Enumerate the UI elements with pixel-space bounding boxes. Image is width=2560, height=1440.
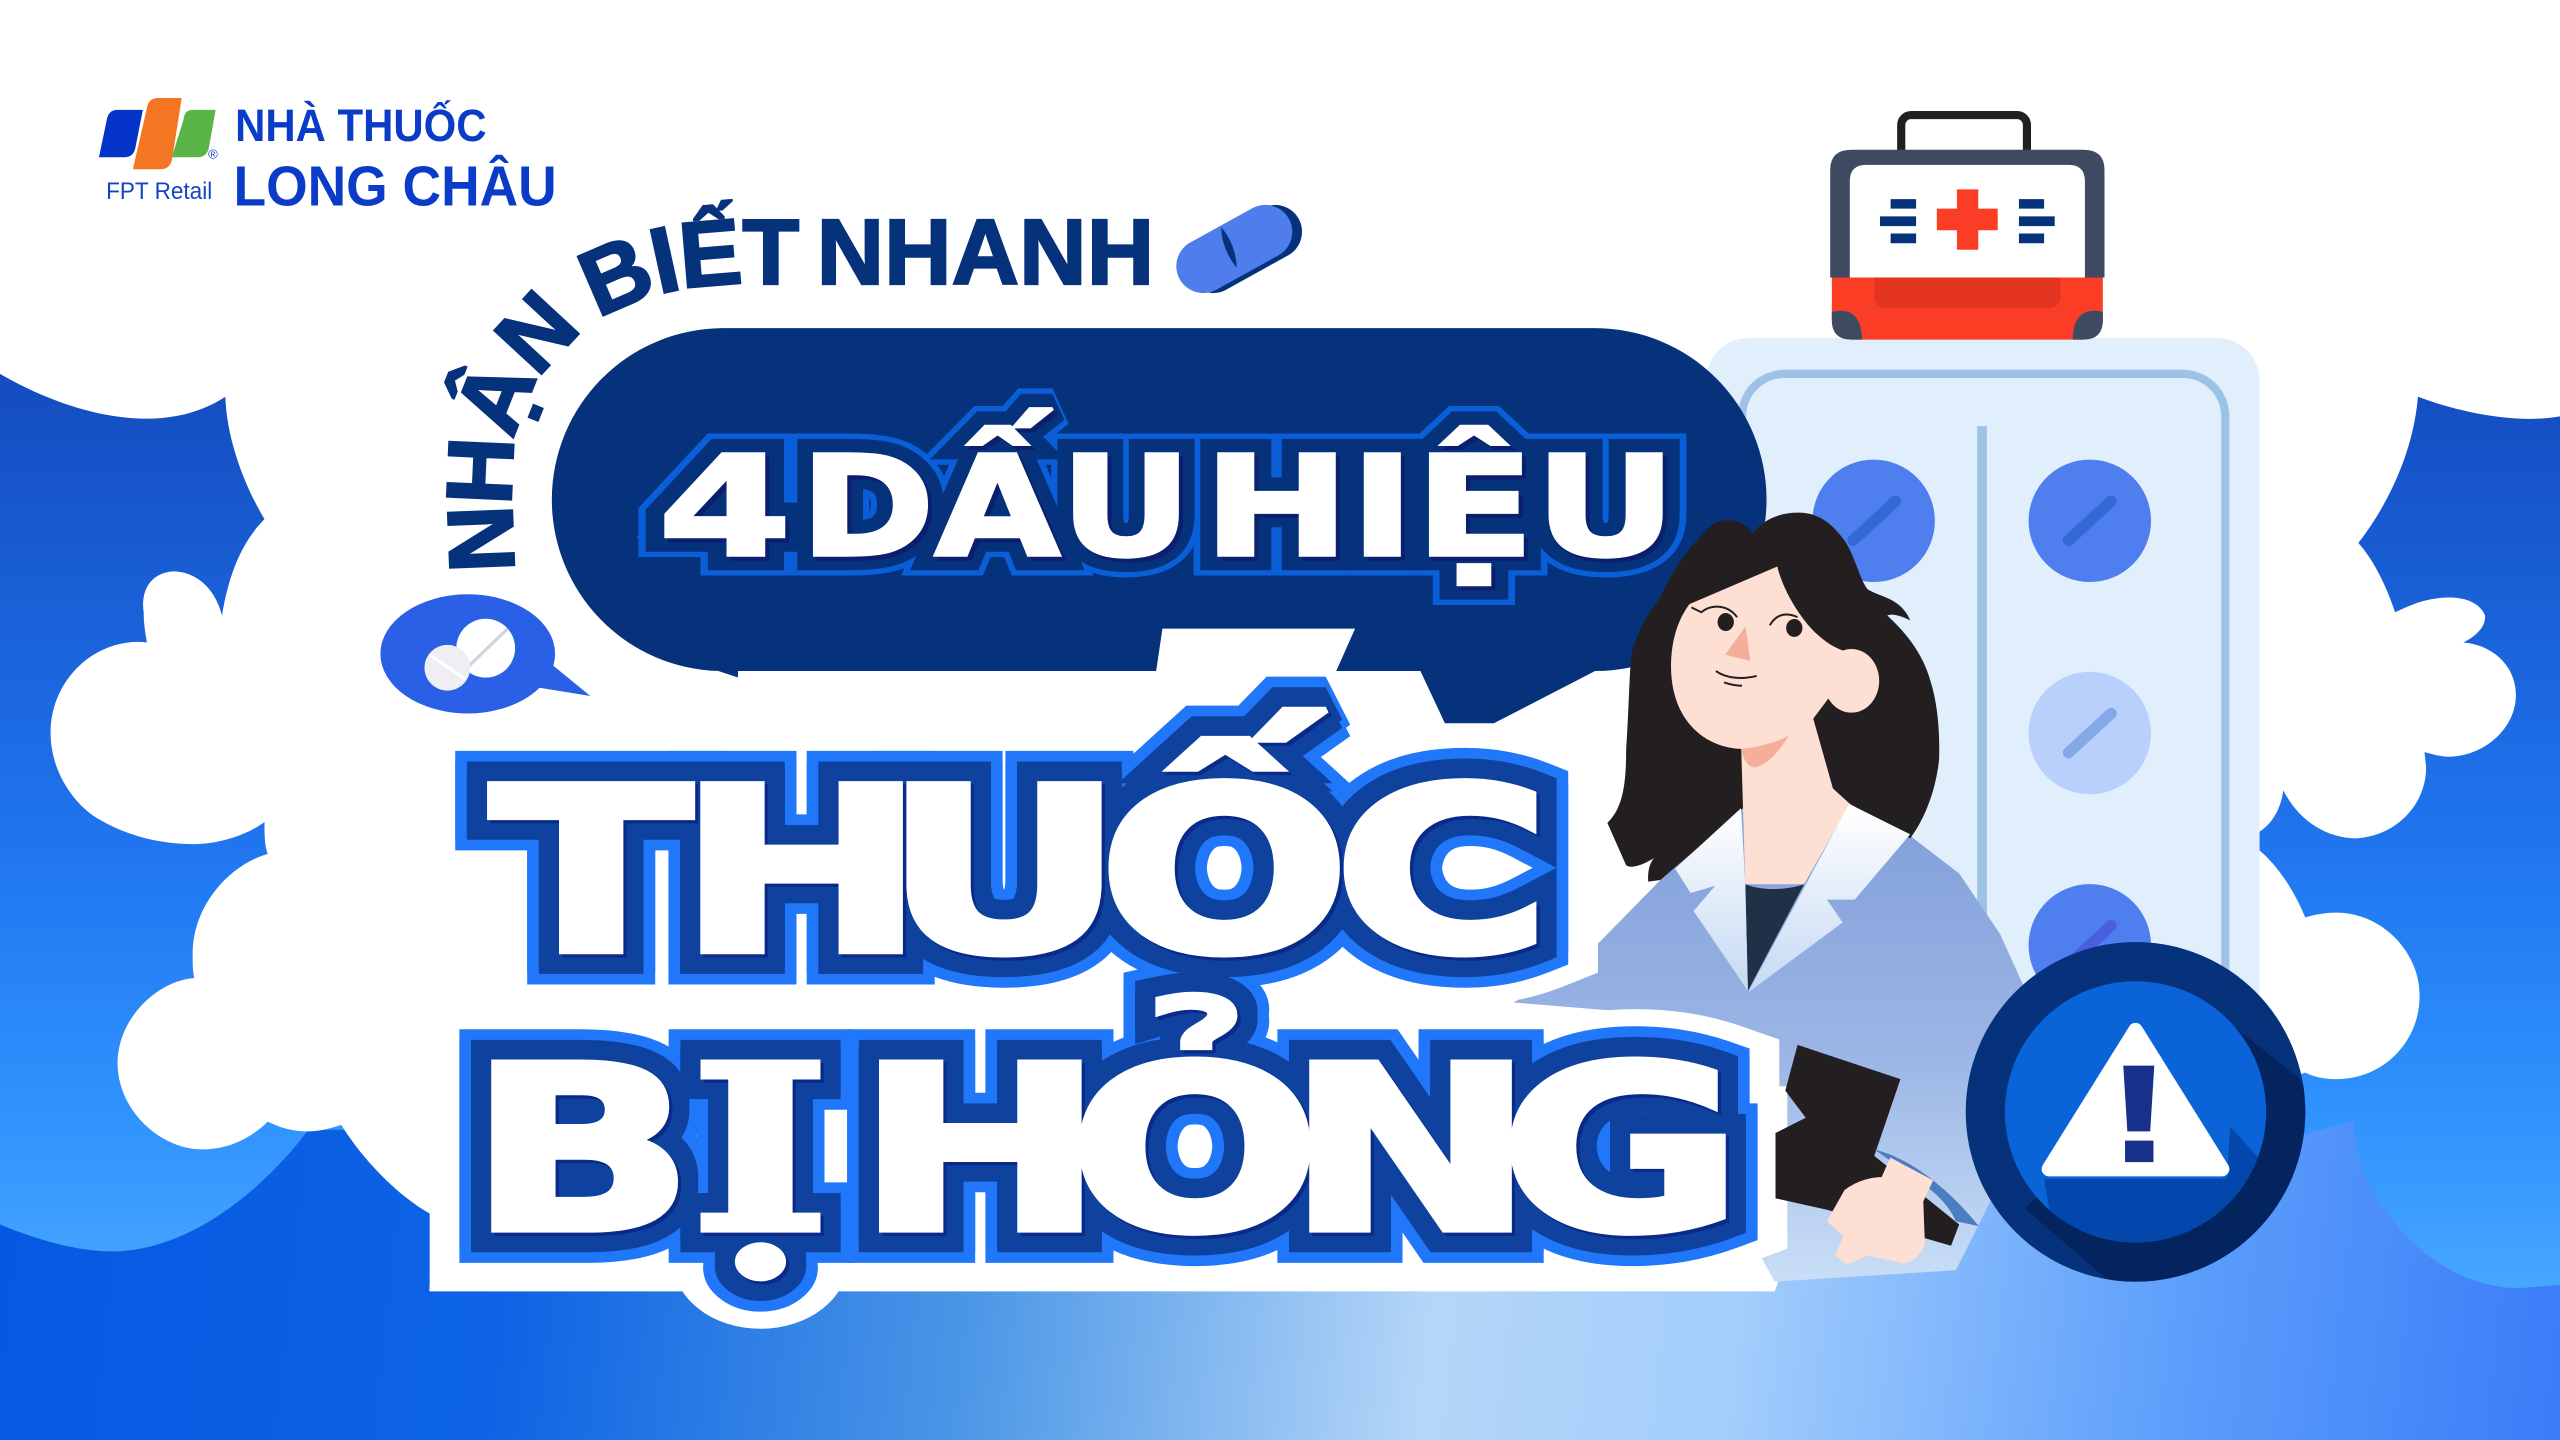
heading: 4 DẤU HIỆU: HIỆU (1203, 426, 1677, 588)
heading: 4 DẤU HIỆU: HIỆU (1207, 430, 1681, 592)
main title: THUỐC BỊ HỎNG: HỎNG (856, 988, 1743, 1278)
icon: first aid kit (1830, 115, 2104, 340)
outer ring long shadow (2024, 1028, 2306, 1282)
icon: capsule (1203, 227, 1275, 268)
main title: THUỐC BỊ HỎNG: HỎNG (856, 990, 1743, 1280)
blister pack panel (1706, 338, 2260, 1190)
heading: 4 DẤU HIỆU: DẤU (804, 412, 1196, 592)
main title: THUỐC BỊ HỎNG: B (468, 1021, 695, 1288)
LONG CHÂU wordmark: LONG CHÂU (233, 155, 557, 218)
white sticker tab over bubble (1156, 629, 1355, 673)
hair (1607, 513, 1939, 882)
main title: THUỐC BỊ HỎNG: B (468, 1023, 695, 1289)
heading: 4 DẤU HIỆU: 4 (658, 426, 792, 588)
main title: THUỐC BỊ HỎNG: B (468, 1013, 695, 1280)
nose (1725, 626, 1750, 661)
clipboard (1776, 1045, 1959, 1246)
FPT Retail label: FPT Retail (106, 179, 212, 205)
main title: THUỐC BỊ HỎNG: Ị (691, 1009, 830, 1278)
neck shadow (1741, 735, 1789, 767)
NHÀ THUỐC wordmark: NHÀ THUỐC (235, 99, 487, 151)
collar left (1675, 808, 1748, 991)
sleeve cuff (1874, 1149, 1979, 1226)
main title: THUỐC BỊ HỎNG: HỎNG (856, 994, 1743, 1284)
pill 3 (2029, 672, 2151, 794)
heading: 4 DẤU HIỆU: 4 (658, 426, 792, 588)
main title: THUỐC BỊ HỎNG (468, 702, 1747, 1289)
main title: THUỐC BỊ HỎNG: Ị (691, 1011, 830, 1280)
main title: THUỐC BỊ HỎNG: HỎNG (859, 997, 1747, 1287)
inner long shadow (2044, 1126, 2258, 1242)
heading: 4 DẤU HIỆU: DẤU (800, 408, 1192, 588)
background: blue sky band (0, 327, 2560, 1440)
woman: figure (1607, 513, 1979, 1264)
main title: THUỐC BỊ HỎNG: B (468, 1012, 695, 1278)
main title: THUỐC BỊ HỎNG: B (471, 1021, 698, 1287)
heading: 4 DẤU HIỆU (658, 408, 1681, 592)
icon: warning badge (1966, 942, 2318, 1306)
shirt (1745, 884, 1804, 991)
main title: THUỐC BỊ HỎNG: THUỐC (490, 712, 1551, 1009)
main title: THUỐC BỊ HỎNG: THUỐC (493, 711, 1554, 1009)
eyes and brows (1691, 607, 1802, 686)
icon: pills speech bubble (380, 594, 590, 713)
collar right (1748, 804, 1910, 993)
main title: THUỐC BỊ HỎNG: THUỐC (490, 708, 1551, 1005)
main title: THUỐC BỊ HỎNG: THUỐC (490, 714, 1551, 1011)
pill 4 (2029, 884, 2151, 1007)
main title: THUỐC BỊ HỎNG: HỎNG (856, 998, 1743, 1288)
exclamation mark (2123, 1066, 2154, 1162)
heading: curved NHẬN BIẾT NHANH: NHẬN BIẾT NHANH (444, 198, 1149, 569)
main title: THUỐC BỊ HỎNG: Ị (691, 1019, 830, 1288)
main title: THUỐC BỊ HỎNG: THUỐC (490, 702, 1551, 1000)
face (1671, 567, 1844, 749)
heading: 4 DẤU HIỆU: 4 (658, 426, 792, 588)
main title: THUỐC BỊ HỎNG: HỎNG (856, 994, 1743, 1284)
logo: FPT Retail Long Chau (99, 98, 557, 218)
main title: THUỐC BỊ HỎNG: Ị (691, 1020, 830, 1289)
ear (1824, 649, 1879, 713)
warning triangle (2049, 1030, 2222, 1169)
heading: 4 DẤU HIỆU: DẤU (800, 408, 1192, 588)
pill 1 (1812, 460, 1935, 582)
main title: THUỐC BỊ HỎNG: Ị (691, 1015, 830, 1284)
pill 2 (2029, 460, 2151, 582)
heading: 4 DẤU HIỆU: HIỆU (1203, 426, 1677, 588)
heading: 4 DẤU HIỆU: DẤU (800, 408, 1192, 588)
heading: 4 DẤU HIỆU: HIỆU (1203, 426, 1677, 588)
main title: THUỐC BỊ HỎNG: B (468, 1017, 695, 1284)
main title: THUỐC BỊ HỎNG: B (468, 1017, 695, 1284)
main title: THUỐC BỊ HỎNG: Ị (694, 1018, 833, 1287)
background: foreground wave gradient (0, 1120, 2560, 1440)
main title: THUỐC BỊ HỎNG: Ị (691, 1015, 830, 1284)
main title: THUỐC BỊ HỎNG: THUỐC (490, 708, 1551, 1005)
registered mark: ® (208, 146, 218, 161)
icon: FPT bars (99, 98, 216, 169)
neck (1741, 715, 1850, 884)
main title: THUỐC BỊ HỎNG: THUỐC (490, 704, 1551, 1001)
heading: 4 DẤU HIỆU: 4 (662, 430, 796, 592)
speech bubble: navy panel with tail (552, 328, 1767, 723)
main title: THUỐC BỊ HỎNG: HỎNG (856, 999, 1743, 1289)
hand (1827, 1158, 1933, 1264)
woman: coat (1513, 803, 2041, 1282)
